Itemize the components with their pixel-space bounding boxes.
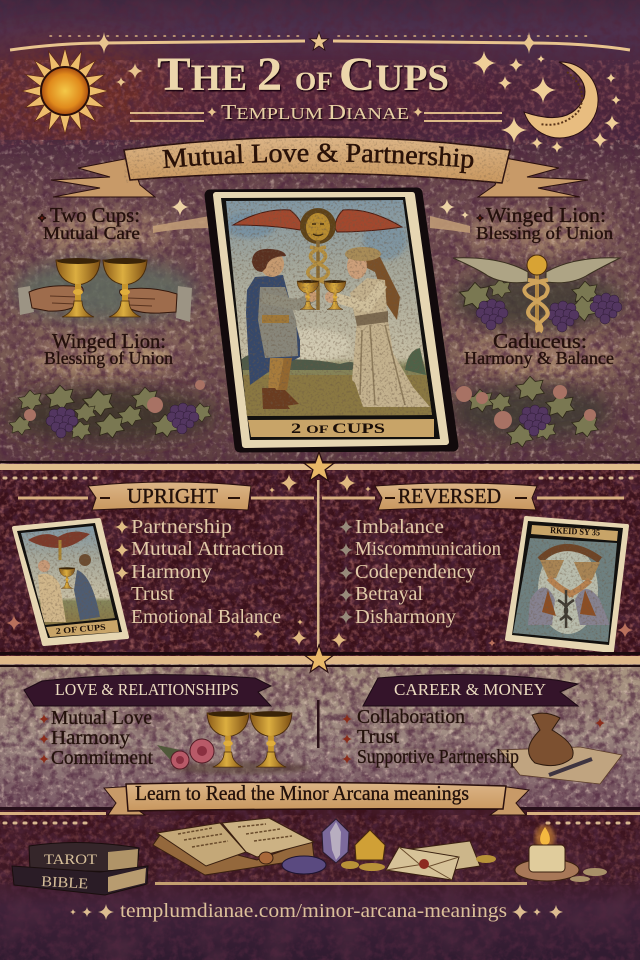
mini card: reversed	[507, 518, 627, 651]
mini card: upright: 2 OF CUPS	[55, 622, 106, 636]
illustration: tarot and bible books	[12, 842, 148, 895]
title: THE 2 OF CUPS	[157, 48, 449, 101]
list: upright meanings: Trust	[131, 583, 174, 605]
label: Caduceus: Caduceus:	[493, 329, 587, 353]
banner: learn to read	[104, 781, 529, 815]
list: reversed meanings: Betrayal	[355, 583, 423, 605]
divider: lower star rule	[0, 645, 640, 672]
subtitle: Templum Dianae: TEMPLUM DIANAE	[221, 100, 409, 124]
list: reversed meanings: Disharmony	[355, 606, 456, 628]
footer rule with dots	[0, 807, 640, 823]
illustration: crystals, coins and stone	[282, 819, 385, 874]
illustration: caduceus with wings and grapes	[452, 255, 622, 332]
banner: Mutual Love & Partnership	[50, 136, 588, 198]
label: Two Cups: Mutual Care	[43, 223, 140, 243]
banner: love and relationships	[24, 675, 271, 706]
header ornament rule	[10, 32, 630, 54]
list: career meanings: Supportive Partnership	[357, 746, 519, 768]
mini card: upright	[14, 520, 127, 644]
label: Two Cups: Two Cups:	[50, 203, 140, 227]
label: Winged Lion: Blessing of Union	[44, 348, 173, 368]
icon: sun	[22, 48, 108, 134]
label: Winged Lion right	[476, 203, 613, 243]
label: Caduceus: Harmony & Balance	[464, 348, 614, 368]
label: Winged Lion	[44, 329, 173, 368]
panel: right symbols	[450, 203, 622, 447]
divider: upper star rule	[0, 452, 640, 481]
banner: upright	[18, 482, 314, 510]
left star sparkles	[116, 63, 143, 87]
banner: learn to read: Learn to Read the Minor Arcana meanings	[135, 781, 469, 805]
panel: left symbols	[5, 203, 215, 441]
label: Winged Lion right: Blessing of Union	[476, 223, 613, 243]
list: reversed meanings: Miscommunication	[355, 538, 501, 560]
banner: Mutual Love & Partnership: Mutual Love & Partnership	[162, 143, 474, 174]
figure: woman	[325, 247, 430, 407]
list: upright meanings: Mutual Attraction	[131, 538, 284, 560]
illustration: grape vines	[5, 380, 215, 441]
panel: career and money	[330, 674, 622, 784]
sparkles: reversed	[331, 474, 633, 648]
panel: reversed	[322, 474, 636, 651]
illustration: letter, pen and pouch	[500, 713, 622, 784]
list: love meanings: Commitment	[51, 747, 153, 769]
center divider	[317, 700, 320, 748]
label: Two Cups	[38, 203, 140, 243]
list: reversed meanings: Imbalance	[355, 516, 444, 538]
banner: career and money: CAREER & MONEY	[394, 680, 546, 699]
banner: reversed: REVERSED	[398, 484, 501, 508]
card art	[220, 198, 440, 420]
list: upright meanings	[115, 516, 284, 628]
banner: love and relationships: LOVE & RELATIONSHIPS	[55, 680, 239, 699]
main tarot card: 2 of Cups: 2 OF CUPS	[291, 421, 385, 437]
list: reversed meanings: Codependency	[355, 561, 476, 583]
illustration: open book	[153, 818, 314, 875]
illustration: sealed envelope	[386, 841, 496, 880]
vertical divider	[317, 480, 320, 650]
icon: caduceus and cups	[297, 240, 346, 310]
list: upright meanings: Partnership	[131, 516, 232, 538]
figure: man	[246, 249, 317, 409]
list: career meanings: Trust	[357, 726, 399, 748]
list: love meanings: Mutual Love	[51, 707, 152, 729]
panel: love and relationships	[24, 675, 310, 774]
ribbons behind card	[153, 216, 470, 233]
label: Winged Lion right: Winged Lion:	[486, 203, 606, 227]
list: reversed meanings	[339, 516, 501, 628]
main tarot card: 2 of Cups	[210, 193, 453, 447]
illustration: flowering vine	[450, 376, 610, 447]
icon: winged lion	[233, 208, 402, 244]
subtitle: Templum Dianae	[130, 100, 502, 124]
book: tarot: TAROT	[44, 852, 97, 868]
label: Winged Lion: Winged Lion:	[52, 329, 166, 353]
label: Caduceus	[464, 329, 614, 368]
illustration: two cups held by hands	[15, 258, 195, 322]
list: career meanings: Collaboration	[357, 706, 465, 728]
banner: reversed	[322, 483, 624, 510]
panel: upright	[4, 474, 314, 646]
sparkles: upright	[6, 474, 307, 646]
sparkles near card	[171, 198, 469, 219]
list: love meanings: Harmony	[51, 727, 130, 749]
rule under shelf	[155, 882, 527, 885]
list: career meanings	[330, 706, 519, 768]
list: upright meanings: Emotional Balance	[131, 606, 281, 628]
icon: crescent moon with stars	[472, 51, 621, 153]
illustration: goblets and roses	[157, 711, 310, 774]
banner: career and money	[363, 674, 578, 706]
list: upright meanings: Harmony	[131, 561, 212, 583]
book: bible: BIBLE	[41, 874, 89, 892]
banner: upright: UPRIGHT	[127, 484, 218, 508]
illustration: candle on dish	[515, 825, 607, 882]
mini card: reversed: RKEID SY 35	[550, 525, 601, 538]
list: love meanings	[36, 707, 170, 769]
url with sparkles: templumdianae.com/minor-arcana-meanings	[120, 900, 507, 922]
